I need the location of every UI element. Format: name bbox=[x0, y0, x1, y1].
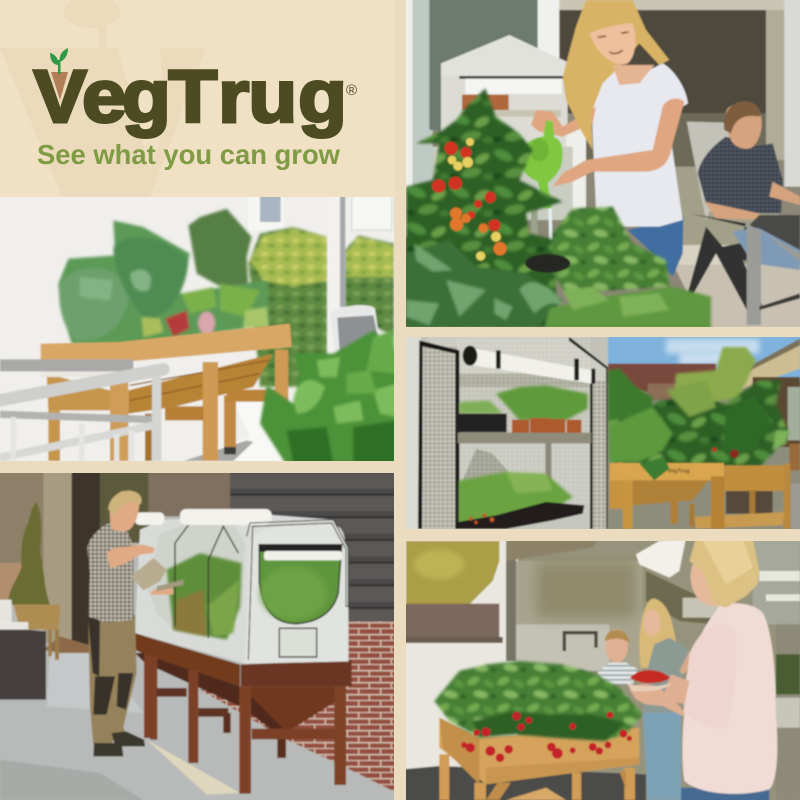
man with watering can bbox=[87, 491, 184, 756]
topiary and planter bbox=[8, 501, 61, 660]
sky bbox=[573, 334, 800, 380]
hedge bbox=[248, 227, 394, 387]
logo wordmark: VegTrug bbox=[33, 56, 347, 138]
strawberry foliage bbox=[434, 661, 643, 741]
icon: beige watering can bbox=[131, 558, 184, 591]
bowl of strawberries bbox=[626, 670, 671, 691]
panel: photo family picking strawberries bbox=[406, 541, 800, 800]
cabbage leaves bbox=[406, 240, 563, 327]
roof bbox=[608, 364, 716, 397]
face features bbox=[598, 32, 629, 53]
tomato plants bbox=[406, 88, 711, 330]
logo wordmark: ® bbox=[346, 82, 357, 99]
roll-up covers bbox=[180, 509, 272, 525]
table bbox=[747, 215, 800, 325]
woman with watering can bbox=[519, 0, 688, 277]
panel: photo man with covered planter bbox=[0, 473, 394, 800]
greenhouse cover bbox=[135, 509, 348, 664]
house eave bbox=[713, 340, 800, 399]
panel: photo planter with kale bbox=[0, 197, 394, 461]
upper shelf with tray and pots bbox=[457, 385, 591, 490]
right window bbox=[259, 544, 342, 624]
foreground shrub bbox=[260, 330, 398, 465]
trees bbox=[608, 347, 756, 424]
tomatoes bbox=[432, 142, 500, 231]
icon: sprout in pot bbox=[50, 48, 68, 100]
panel: logo on wood bbox=[0, 0, 395, 197]
children bbox=[598, 598, 693, 800]
panel: photo woman watering tomatoes bbox=[406, 0, 800, 327]
seedling trays bbox=[458, 472, 584, 529]
building background left bbox=[0, 470, 232, 660]
bamboo plant and trough bbox=[403, 541, 503, 643]
tagline: See what you can grow bbox=[37, 139, 340, 170]
wooden planter stand bbox=[135, 633, 352, 794]
mini greenhouse bbox=[433, 35, 586, 220]
kale and herbs bbox=[58, 209, 270, 345]
strawberry planter bbox=[434, 661, 643, 800]
left window bbox=[147, 523, 245, 640]
grey chair bbox=[330, 305, 380, 367]
woman in pink top bbox=[626, 538, 777, 800]
brick wall bbox=[200, 621, 397, 793]
man seated bbox=[687, 101, 800, 312]
floor bbox=[183, 400, 290, 461]
railing bbox=[0, 365, 163, 461]
herb bed bbox=[544, 207, 711, 330]
paving bbox=[0, 653, 240, 800]
pocket bbox=[279, 628, 317, 657]
outdoor sofa bbox=[0, 600, 46, 700]
exterior wall bbox=[403, 538, 518, 771]
greenhouse frame bbox=[403, 334, 608, 532]
strawberries bbox=[461, 712, 632, 762]
decking bbox=[403, 766, 646, 800]
glass door with reflections bbox=[506, 538, 800, 800]
leaf over planter bbox=[639, 457, 669, 480]
icon: green watering can bbox=[519, 120, 563, 208]
vegetable plants bbox=[608, 380, 789, 467]
patio floor bbox=[673, 263, 800, 330]
planter logo: VegTrug bbox=[667, 469, 690, 475]
panel: photo greenhouse with seedlings bbox=[406, 337, 800, 529]
wooden planter bbox=[41, 324, 292, 461]
planter reservoir bbox=[525, 254, 570, 273]
wooden planters bbox=[609, 457, 800, 529]
rolled cover bbox=[463, 346, 595, 384]
